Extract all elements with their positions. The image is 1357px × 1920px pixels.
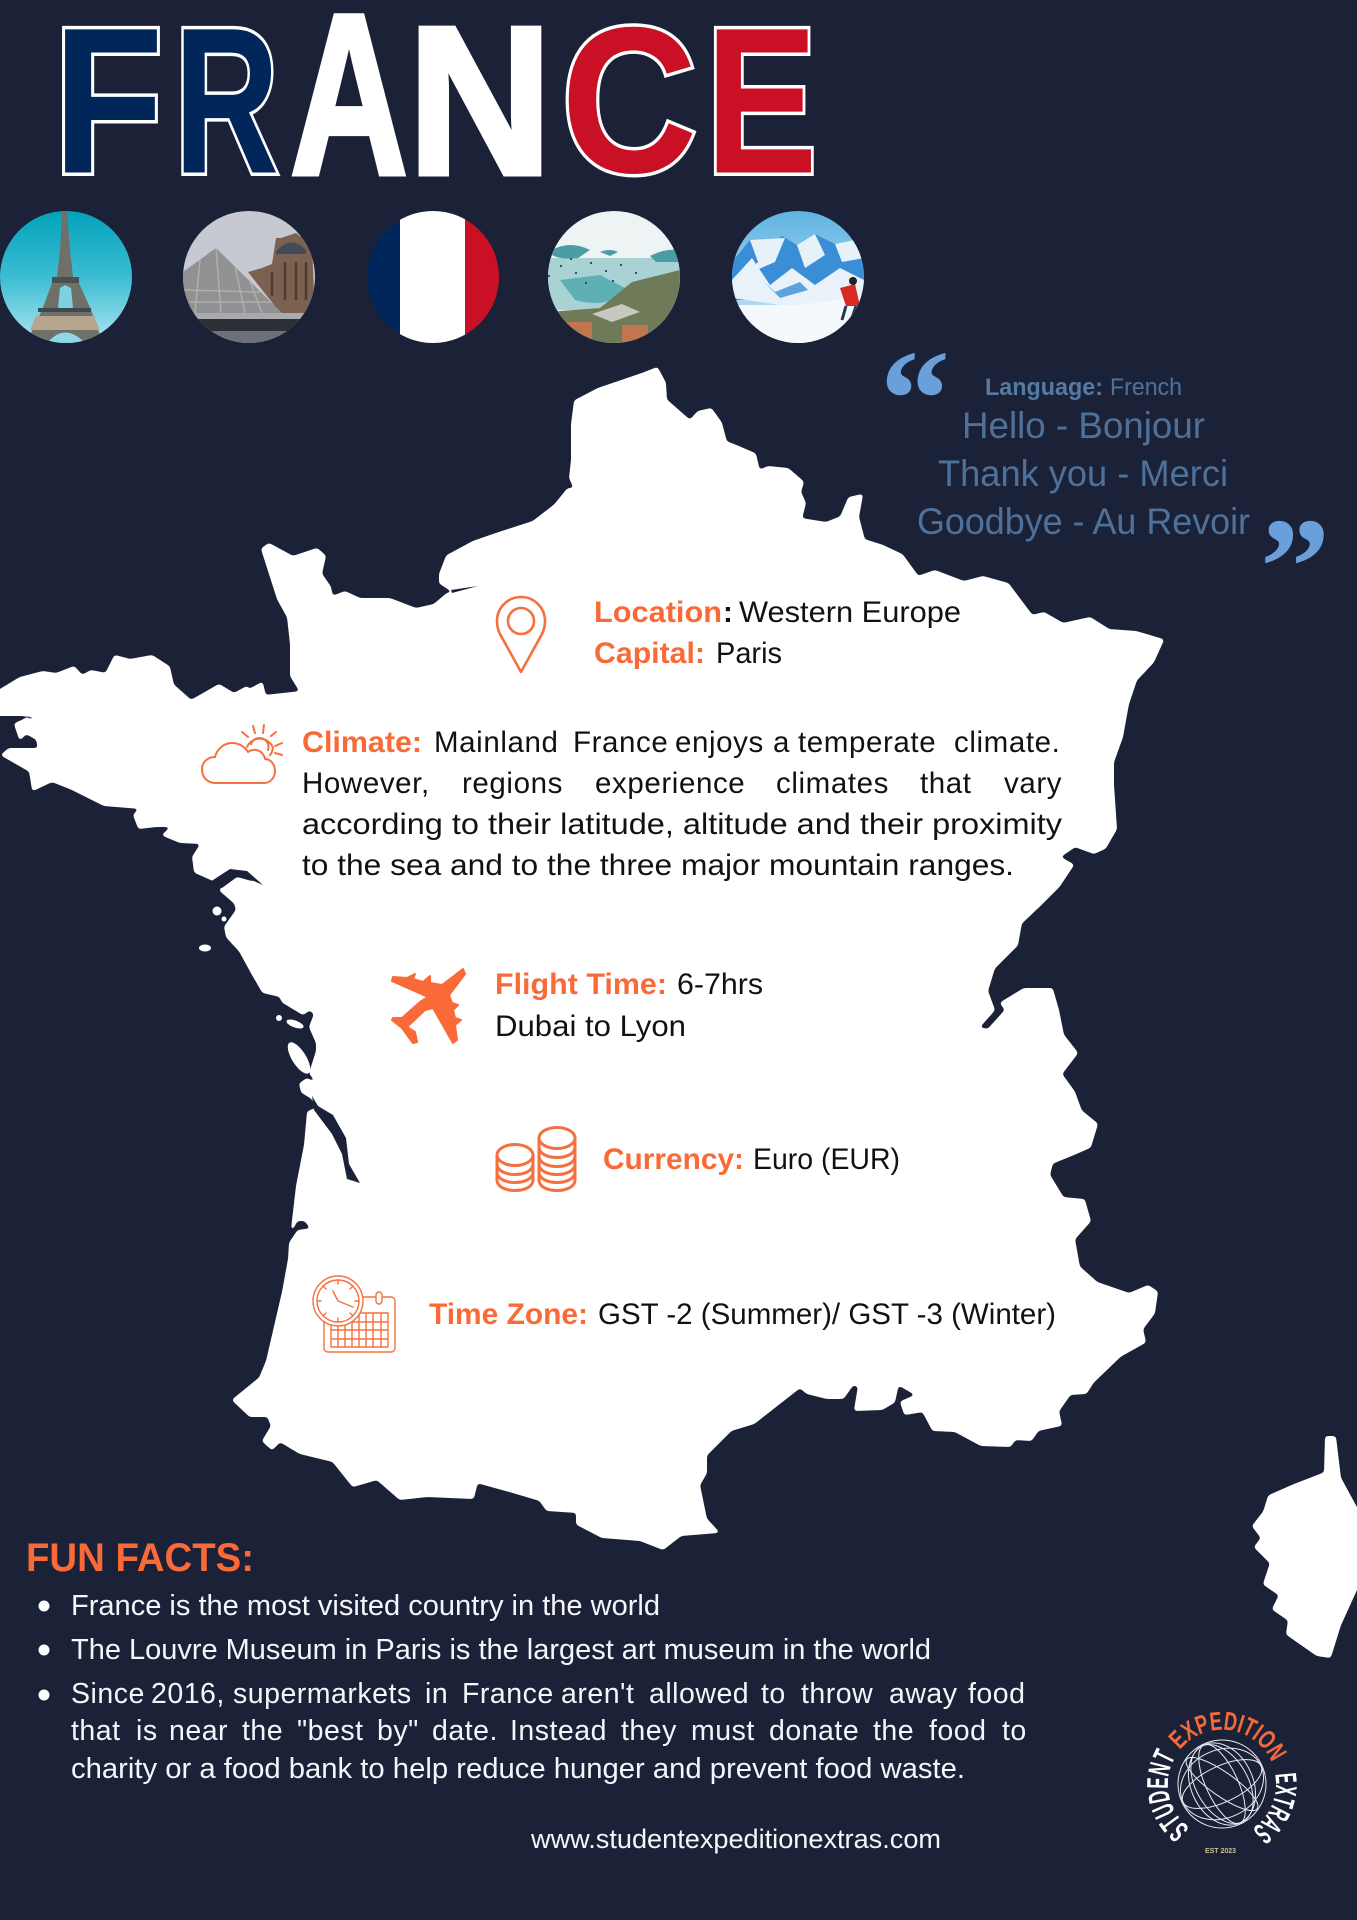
climate text [302,726,1062,882]
language quote block [880,322,1330,645]
fun facts bullet list: must [691,1715,755,1747]
flight time text: Dubai to Lyon [495,1010,686,1043]
fun facts bullet list: allowed [649,1678,749,1710]
icon: location pin [497,597,545,672]
fun facts bullet list: 2016, [151,1678,225,1710]
climate text: vary [1004,767,1062,800]
photo: French flag [367,211,499,343]
map of mainland France and islands [0,368,1357,1657]
language quote block: Goodbye - Au Revoir [917,501,1250,542]
logo: Student Expedition Extras [1147,1712,1297,1855]
language label: Language: [985,374,1103,401]
fun facts bullet list: away [889,1678,958,1710]
fun facts bullet list: is [136,1715,158,1747]
logo arc text: expedition: EXPEDITION [1168,1712,1287,1762]
flight time text: 6-7hrs [677,968,763,1001]
fun facts bullet list: food [929,1715,986,1747]
climate text: Climate: [302,726,422,759]
fun facts bullet list [38,1590,1027,1785]
closing quote mark: ” [1260,490,1330,645]
climate text: to the sea and to the three major mountain ranges. [302,849,1014,882]
fun facts bullet list: to [1002,1715,1027,1747]
photo: Riviera coast [548,211,680,343]
climate text: experience [595,767,745,800]
fun facts bullet list: donate [769,1715,859,1747]
fun facts bullet list: Instead [510,1715,607,1747]
flight time text [495,968,763,1043]
fun facts bullet list: aren't [561,1678,634,1710]
fun facts bullet list: date. [432,1715,498,1747]
icon: cloud and sun [202,725,282,783]
time zone text: GST -2 (Summer)/ GST -3 (Winter) [598,1298,1056,1331]
fun facts bullet list: charity or a food bank to help reduce hunger and prevent food waste. [71,1753,965,1785]
language quote block: Thank you - Merci [938,453,1228,494]
climate text: climates [776,767,889,800]
fun facts bullet list: that [71,1715,121,1747]
climate text: a [773,726,790,759]
fun facts bullet list: France [462,1678,554,1710]
location and capital text: Location [594,596,722,629]
fun facts heading: FUN FACTS: [26,1536,254,1580]
climate text: temperate [798,726,936,759]
fun facts bullet list: the [873,1715,914,1747]
opening quote mark: “ [880,322,950,477]
fun facts bullet list: the [242,1715,283,1747]
website url: www.studentexpeditionextras.com [530,1824,941,1854]
climate text: climate. [954,726,1060,759]
fun facts bullet list: The Louvre Museum in Paris is the largest art museum in the world [71,1634,931,1666]
fun facts bullet list: Since [71,1678,145,1710]
currency text: Euro (EUR) [753,1143,900,1176]
currency text: Currency: [603,1143,744,1176]
logo arc text: extras: EXTRAS [1254,1773,1297,1844]
flight time text: Flight Time: [495,968,667,1001]
language quote block: French [1110,374,1182,401]
fun facts bullet list: near [169,1715,228,1747]
fun facts bullet list: food [968,1678,1025,1710]
fun facts bullet list: in [425,1678,448,1710]
climate text: France [573,726,668,759]
fun facts bullet list: to [761,1678,786,1710]
logo established year: EST 2023 [1205,1846,1236,1855]
title: FRANCE [53,0,818,223]
globe [1169,1732,1275,1836]
climate text: according to their latitude, altitude and their proximity [302,808,1062,841]
location and capital text: : [723,596,733,629]
fun facts bullet list: "best [297,1715,364,1747]
fun facts bullet list: they [621,1715,677,1747]
fun facts bullet list: by" [377,1715,419,1747]
location and capital text [594,596,961,670]
climate text: regions [462,767,563,800]
photo: Eiffel Tower [0,211,132,343]
photo: ski slope with Alps [732,211,864,343]
fun facts bullet list: throw [801,1678,873,1710]
icon: airplane [392,969,465,1043]
fun facts bullet list: supermarkets [233,1678,412,1710]
location and capital text: Capital: [594,637,705,670]
icon: coin stacks [497,1128,575,1190]
photo: Louvre pyramid [183,211,315,343]
location and capital text: Paris [716,637,782,670]
greeting phrases: Hello - Bonjour [962,405,1205,446]
climate text: However, [302,767,430,800]
logo arc text: student: STUDENT [1147,1748,1188,1842]
time zone text: Time Zone: [429,1298,588,1331]
currency text [603,1143,900,1176]
fun facts bullet list: France is the most visited country in the world [71,1590,660,1622]
climate text: that [920,767,972,800]
location and capital text: Western Europe [739,596,961,629]
icon: clock and calendar [313,1276,395,1352]
climate text: Mainland [434,726,559,759]
climate text: enjoys [675,726,764,759]
